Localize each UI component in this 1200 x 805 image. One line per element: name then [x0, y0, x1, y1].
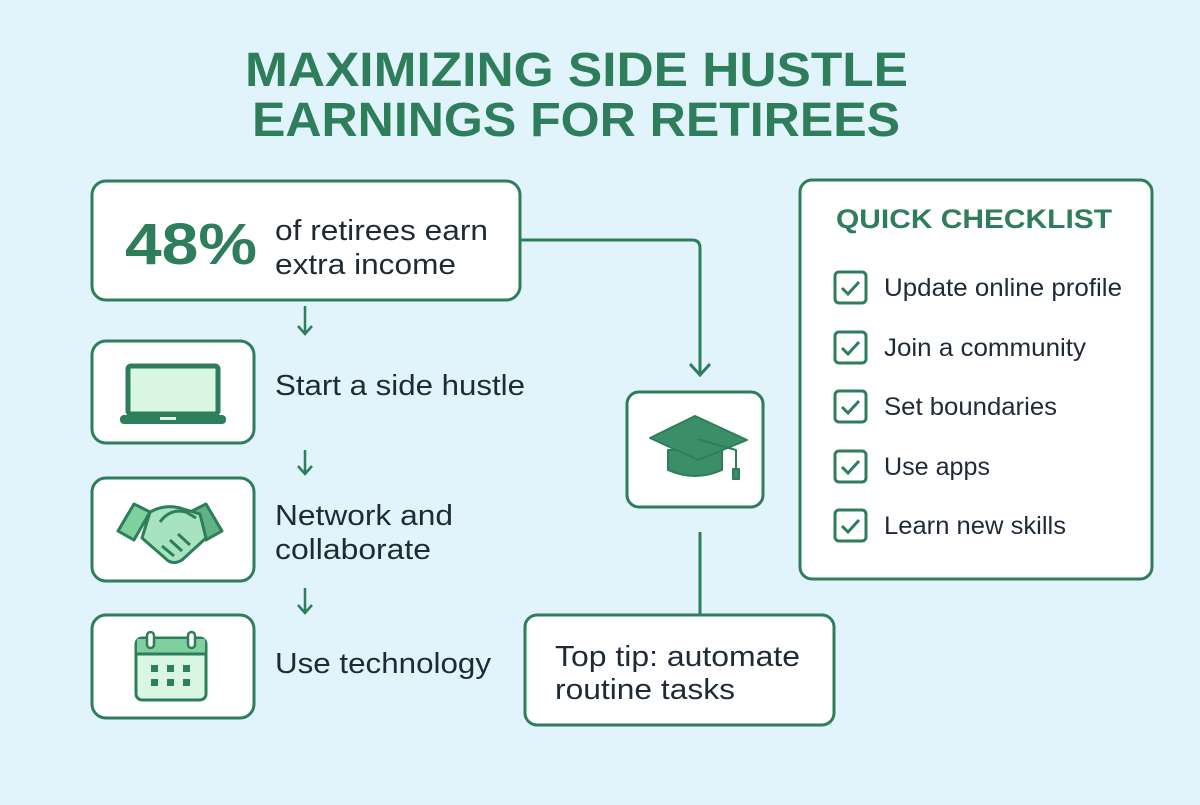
panel: start a side hustle: Start a side hustle	[275, 370, 525, 402]
panel: network	[92, 478, 453, 581]
panel: stat 48%	[92, 181, 520, 300]
icon: calendar	[136, 632, 206, 700]
checklist items: Use apps	[884, 453, 990, 481]
checklist items	[835, 272, 1122, 541]
panel: use technology	[92, 615, 492, 718]
panel: network: collaborate	[275, 534, 431, 566]
panel: stat 48%: 48%	[125, 212, 257, 277]
checklist items: Join a community	[884, 334, 1087, 362]
connector: graduation to tip	[698, 532, 702, 615]
checklist heading: QUICK CHECKLIST	[836, 204, 1113, 234]
title: EARNINGS FOR RETIREES	[252, 94, 900, 147]
checklist items: Set boundaries	[884, 393, 1057, 421]
panel: use technology: Use technology	[275, 648, 492, 680]
icon: graduation cap	[650, 416, 747, 479]
panel: start a side hustle	[92, 341, 525, 443]
panel: graduation	[627, 392, 763, 507]
panel: stat 48%: of retirees earn	[275, 215, 488, 247]
connector: stat to graduation	[520, 240, 710, 375]
title: MAXIMIZING SIDE HUSTLE	[245, 44, 908, 97]
panel: stat 48%: extra income	[275, 249, 456, 281]
panel: top tip: routine tasks	[555, 674, 735, 706]
arrow 2	[298, 450, 312, 474]
icon: laptop	[120, 366, 226, 424]
panel: top tip	[525, 615, 834, 725]
panel: network: Network and	[275, 500, 453, 532]
arrow 1	[298, 306, 312, 334]
panel: quick checklist	[800, 180, 1152, 579]
icon: handshake	[118, 504, 222, 563]
panel: top tip: Top tip: automate	[555, 641, 800, 673]
title	[245, 44, 908, 147]
checklist items: Update online profile	[884, 274, 1122, 302]
arrow 3	[298, 588, 312, 613]
checklist items: Learn new skills	[884, 512, 1066, 540]
